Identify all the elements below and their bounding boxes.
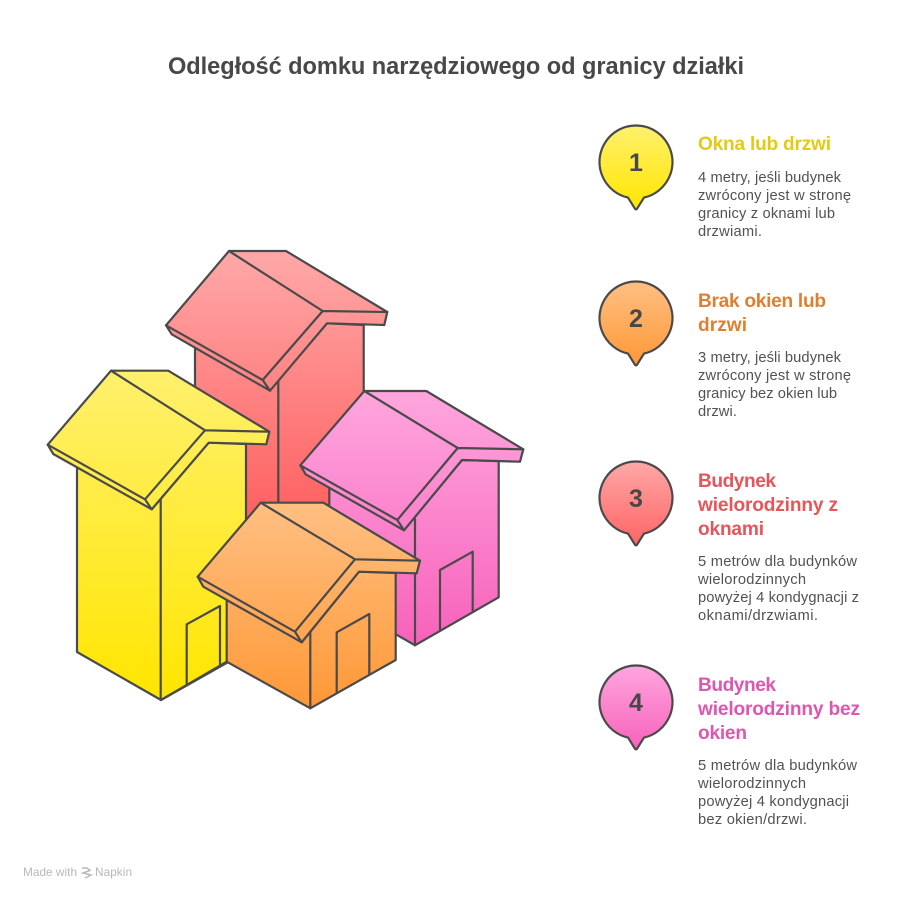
icon: pin 1 (600, 125, 672, 209)
item 3: budynek wielorodzinny z oknami (599, 461, 859, 624)
house: yellow (48, 371, 269, 700)
heading: budynek wielorodzinny bez okien: okien (698, 723, 747, 744)
title: Odległość domku narzędziowego od granicy działki (168, 54, 744, 80)
icon: napkin logo (82, 868, 91, 878)
text: brak okien lub drzwi: drzwi. (698, 404, 737, 420)
text: budynek wielorodzinny bez okien (697, 758, 857, 828)
heading: budynek wielorodzinny z oknami: oknami (698, 519, 764, 540)
heading: brak okien lub drzwi: Brak okien lub (698, 291, 826, 312)
text: okna lub drzwi (698, 170, 851, 240)
heading: budynek wielorodzinny z oknami: Budynek (698, 471, 776, 492)
text: budynek wielorodzinny z oknami (697, 554, 859, 624)
text: brak okien lub drzwi: 3 metry, jeśli budynek (698, 350, 842, 366)
text: budynek wielorodzinny bez okien: powyżej 4 kondygnacji (698, 794, 849, 810)
heading: brak okien lub drzwi (698, 291, 826, 336)
icon: pin 1: 1 (629, 149, 643, 177)
door: pink house (440, 552, 473, 631)
text: budynek wielorodzinny bez okien: 5 metrów dla budynków (698, 758, 857, 774)
icon: pin 3: 3 (629, 485, 643, 513)
icon: pin 4: 4 (629, 689, 643, 717)
item 2: brak okien lub drzwi (599, 281, 851, 420)
heading: budynek wielorodzinny bez okien: wielorodzinny bez (697, 699, 860, 720)
illustration: group of four houses (48, 251, 523, 708)
house: pink (300, 391, 523, 645)
text: budynek wielorodzinny z oknami: oknami/drzwiami. (698, 608, 818, 624)
door: orange house (337, 614, 369, 693)
icon: pin 3 (599, 461, 672, 545)
footer: made with napkin: Made with (23, 865, 77, 879)
text: okna lub drzwi: zwrócony jest w stronę (698, 188, 851, 204)
text: brak okien lub drzwi: granicy bez okien lub (698, 386, 837, 402)
heading: okna lub drzwi: Okna lub drzwi (698, 134, 831, 155)
icon: pin 2 (599, 281, 672, 365)
footer: made with napkin (23, 865, 132, 879)
text: okna lub drzwi: drzwiami. (698, 224, 762, 240)
icon: pin 4 (599, 665, 672, 749)
door: yellow house (187, 606, 220, 684)
house: red (166, 251, 387, 530)
text: budynek wielorodzinny bez okien: bez okien/drzwi. (698, 812, 807, 828)
heading: budynek wielorodzinny bez okien (697, 675, 860, 744)
text: okna lub drzwi: 4 metry, jeśli budynek (698, 170, 842, 186)
icon: pin 2: 2 (629, 305, 643, 333)
heading: budynek wielorodzinny bez okien: Budynek (698, 675, 776, 696)
text: okna lub drzwi: granicy z oknami lub (698, 206, 835, 222)
text: budynek wielorodzinny bez okien: wielorodzinnych (697, 776, 806, 792)
item 4: budynek wielorodzinny bez okien (599, 665, 860, 828)
footer: made with napkin: Napkin (95, 865, 132, 879)
heading: budynek wielorodzinny z oknami: wielorodzinny z (697, 495, 838, 516)
text: budynek wielorodzinny z oknami: wielorodzinnych (697, 572, 806, 588)
item 1: okna lub drzwi (600, 125, 851, 240)
text: brak okien lub drzwi (698, 350, 851, 420)
text: budynek wielorodzinny z oknami: 5 metrów dla budynków (698, 554, 857, 570)
house: orange (198, 503, 420, 708)
heading: brak okien lub drzwi: drzwi (698, 315, 747, 336)
text: brak okien lub drzwi: zwrócony jest w stronę (698, 368, 851, 384)
text: budynek wielorodzinny z oknami: powyżej 4 kondygnacji z (698, 590, 859, 606)
heading: budynek wielorodzinny z oknami (697, 471, 838, 540)
